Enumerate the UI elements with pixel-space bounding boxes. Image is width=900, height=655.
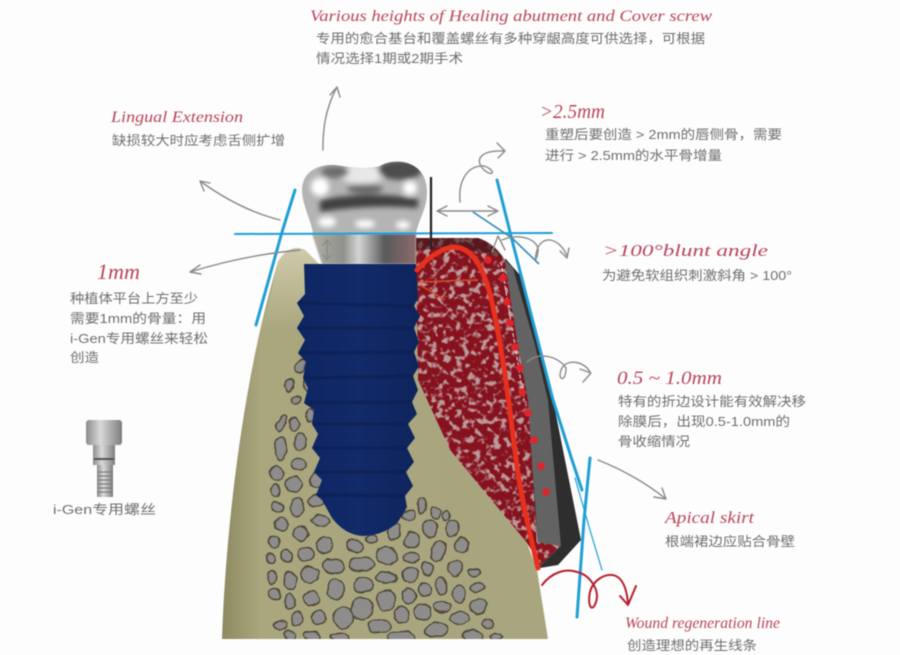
body text: 专用的愈合基台和覆盖螺丝有多种穿龈高度可供选择，可根据: [316, 30, 705, 46]
red fixation dots: [484, 256, 550, 496]
membrane dashed edge: [501, 262, 524, 400]
small 1mm height arrow: [323, 240, 331, 260]
icon: i-Gen screw: [86, 420, 122, 497]
arrow: to heights: [323, 87, 340, 150]
callout: wound regeneration line: [625, 615, 780, 653]
caption: i-Gen screw: i-Gen专用螺丝: [53, 502, 156, 517]
blue sketch reference lines: [235, 180, 602, 617]
callout: blunt angle: [602, 241, 792, 283]
cancellous bone pores: [266, 357, 502, 642]
arrow: to apical skirt: [598, 460, 666, 499]
callout: greater than 2.5mm: [540, 101, 782, 163]
body text: 特有的折边设计能有效解决移: [618, 394, 806, 409]
curl arrow: to 0.5-1.0mm: [527, 356, 591, 382]
heading: Various heights of Healing abutment and Cover screw: [310, 8, 712, 25]
callout: 1mm: [70, 259, 208, 365]
graft tip at flap base: [536, 542, 560, 566]
body text: 进行 > 2.5mm的水平骨增量: [545, 148, 722, 163]
body text: 除膜后，出现0.5-1.0mm的: [618, 414, 790, 429]
thin red sketch line in graft: [419, 280, 478, 300]
healing abutment dome: [302, 160, 428, 234]
graft top shadow: [416, 238, 504, 258]
arrow: to 1mm: [190, 250, 300, 274]
body text: 创造理想的再生线条: [627, 637, 757, 653]
callout: apical skirt: [664, 508, 795, 549]
bone crest highlight: [262, 248, 320, 330]
arrow: to lingual: [200, 181, 280, 220]
bone: [222, 248, 548, 639]
body text: 缺损较大时应考虑舌侧扩增: [112, 133, 285, 148]
implant cross-section diagram: [222, 155, 581, 642]
implant body: [297, 264, 420, 536]
curl arrow: to 2.5mm: [460, 143, 505, 202]
heading: 0.5 ~ 1.0mm: [617, 368, 722, 389]
heading: 1mm: [97, 259, 140, 284]
heading: Wound regeneration line: [625, 615, 780, 632]
membrane dark outer flap: [505, 258, 581, 568]
callout: 0.5 to 1.0mm: [617, 368, 806, 449]
body text: 情况选择1期或2期手术: [316, 51, 463, 66]
implant thread shading: [298, 303, 414, 496]
heading: Apical skirt: [664, 508, 755, 527]
callout: lingual extension: [110, 109, 285, 148]
body text: 重塑后要创造 > 2mm的唇侧骨，需要: [545, 127, 782, 142]
arrow: width double arrow: [437, 206, 498, 216]
black vertical reference line: [430, 177, 432, 250]
body text: 种植体平台上方至少: [70, 291, 198, 306]
body text: 需要1mm的骨量：用: [70, 311, 206, 326]
heading: >2.5mm: [540, 101, 605, 123]
membrane grey inner layer: [503, 258, 561, 566]
healing abutment neck: [312, 234, 416, 264]
red curl arrow: to regeneration line: [542, 571, 636, 608]
small arrow: angle mark: [492, 236, 505, 252]
body text: 为避免软组织刺激斜角 > 100°: [602, 268, 792, 283]
body text: 骨收缩情况: [618, 434, 690, 449]
bone graft granules: [416, 238, 541, 566]
curl arrow: to blunt angle: [502, 237, 569, 259]
heading: >100°blunt angle: [603, 241, 769, 260]
callout: healing abutment heights: [310, 8, 712, 66]
red regeneration curve: [417, 247, 538, 568]
body text: 根端裙边应贴合骨壁: [665, 534, 795, 549]
body text: i-Gen专用螺丝来轻松: [70, 331, 208, 346]
heading: Lingual Extension: [110, 109, 243, 126]
body text: 创造: [70, 350, 99, 365]
